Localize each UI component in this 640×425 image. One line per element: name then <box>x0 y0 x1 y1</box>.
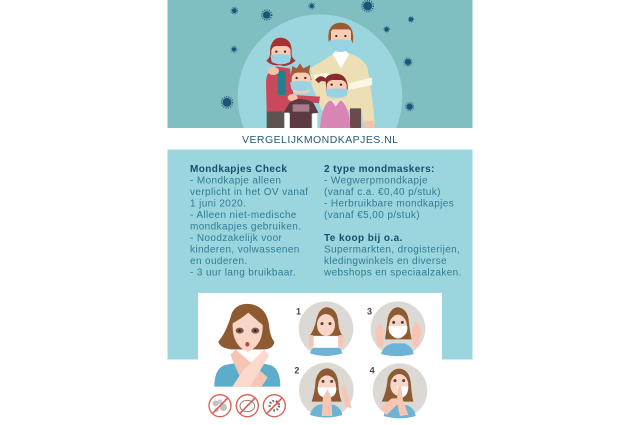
text block: Mondkapjes Check: kinderen, volwassenen <box>190 244 300 256</box>
step 1: hold the mask: 1 <box>296 307 301 317</box>
step 4: adjust the mask <box>370 363 427 418</box>
step 3: tie the mask: 3 <box>367 307 372 317</box>
text block: Mondkapjes Check: - Noodzakelijk voor <box>190 233 283 244</box>
illustration: woman crossing arms <box>214 304 280 387</box>
step 1: hold the mask <box>296 301 353 356</box>
text block: Mondkapjes Check: mondkapjes gebruiken. <box>190 222 301 232</box>
text block: Mondkapjes Check <box>190 164 308 278</box>
icons: virus particles <box>221 0 414 111</box>
text block: where to buy: kledingwinkels en diverse <box>324 256 447 267</box>
step 4: adjust the mask: 4 <box>370 366 375 376</box>
text block: Mondkapjes Check: - Mondkapje alleen <box>190 176 281 186</box>
text block: where to buy: Supermarkten, drogisterijen, <box>324 244 460 256</box>
panel: header illustration <box>168 0 472 128</box>
website name: VERGELIJKMONDKAPJES.NL <box>242 134 398 146</box>
family: father <box>310 23 375 128</box>
text block: mask types: - Wegwerpmondkapje <box>324 176 428 186</box>
text block: Mondkapjes Check: - Alleen niet-medische <box>190 210 297 221</box>
panel: information background <box>168 150 472 360</box>
icons: prohibited items <box>209 395 285 417</box>
light circle backdrop <box>238 14 402 128</box>
text block: mask types: (vanaf c.a. €0,40 p/stuk) <box>324 187 441 198</box>
text block: Mondkapjes Check: 1 juni 2020. <box>190 198 246 210</box>
step 2: place the mask: 2 <box>294 366 299 376</box>
text block: mask types: (vanaf €5,00 p/stuk) <box>324 210 420 221</box>
text block: where to buy: Te koop bij o.a. <box>324 233 403 244</box>
text block: mask types <box>324 164 454 221</box>
text block: where to buy: webshops en speciaalzaken. <box>323 268 462 278</box>
text block: where to buy <box>323 233 462 278</box>
family: mother <box>266 38 320 128</box>
step 3: tie the mask <box>367 301 425 356</box>
text block: mask types: 2 type mondmaskers: <box>324 164 435 175</box>
text block: Mondkapjes Check: en ouderen. <box>190 256 248 267</box>
text block: Mondkapjes Check: verplicht in het OV vanaf <box>190 187 308 198</box>
text block: Mondkapjes Check: - 3 uur lang bruikbaar. <box>190 268 296 278</box>
family: boy <box>284 63 318 128</box>
step 2: place the mask <box>294 363 354 417</box>
family: girl <box>315 74 350 128</box>
panel: instructions white card <box>198 293 442 425</box>
text block: Mondkapjes Check: Mondkapjes Check <box>190 164 287 175</box>
text block: mask types: - Herbruikbare mondkapjes <box>324 198 454 210</box>
